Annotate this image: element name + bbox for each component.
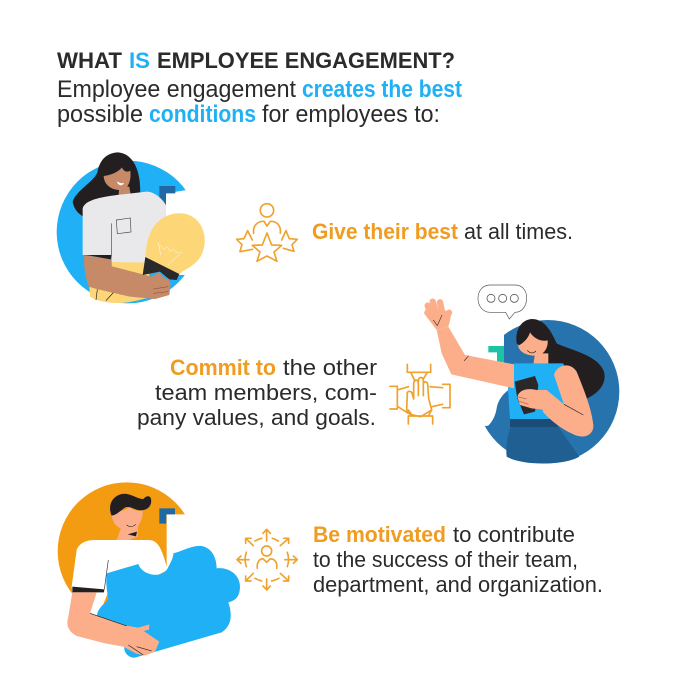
illustration: woman waving with phone	[424, 285, 619, 464]
text: be motivated	[313, 522, 603, 597]
title: EMPLOYEE ENGAGEMENT?	[157, 48, 455, 73]
text: give their best: Give their best	[312, 219, 459, 244]
intro text: creates the best	[302, 76, 462, 103]
text: commit to	[137, 355, 377, 430]
text: commit to: team members, com-	[155, 380, 377, 405]
text: be motivated: department, and organization.	[313, 572, 603, 597]
icon: person with radiating arrows	[237, 529, 297, 590]
text: give their best	[312, 219, 573, 244]
icon: joined hands	[390, 364, 450, 424]
icon: person with stars	[237, 204, 297, 261]
title: WHAT	[57, 48, 122, 73]
intro text: conditions	[149, 101, 256, 128]
intro text	[57, 76, 462, 128]
text: give their best: at all times.	[464, 219, 573, 244]
text: commit to: pany values, and goals.	[137, 405, 376, 430]
text: commit to: Commit to	[170, 355, 276, 380]
text: commit to: the other	[283, 355, 377, 380]
text: be motivated: to contribute	[453, 522, 575, 547]
intro text: possible	[57, 101, 143, 128]
text: be motivated: Be motivated	[313, 522, 446, 547]
intro text: Employee engagement	[57, 76, 296, 103]
text: be motivated: to the success of their team,	[313, 547, 578, 572]
illustration: woman holding light bulb	[57, 152, 213, 303]
intro text: for employees to:	[262, 101, 440, 128]
title: IS	[129, 48, 150, 73]
illustration: man holding puzzle piece	[58, 482, 240, 658]
